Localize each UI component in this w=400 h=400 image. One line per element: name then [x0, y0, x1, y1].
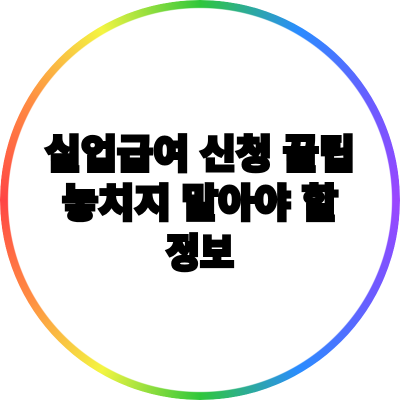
title: 정보 — [166, 233, 234, 276]
title: 실업급여 신청 꿀팁 — [45, 134, 355, 177]
title: 놓치지 말아야 할 — [62, 183, 338, 226]
